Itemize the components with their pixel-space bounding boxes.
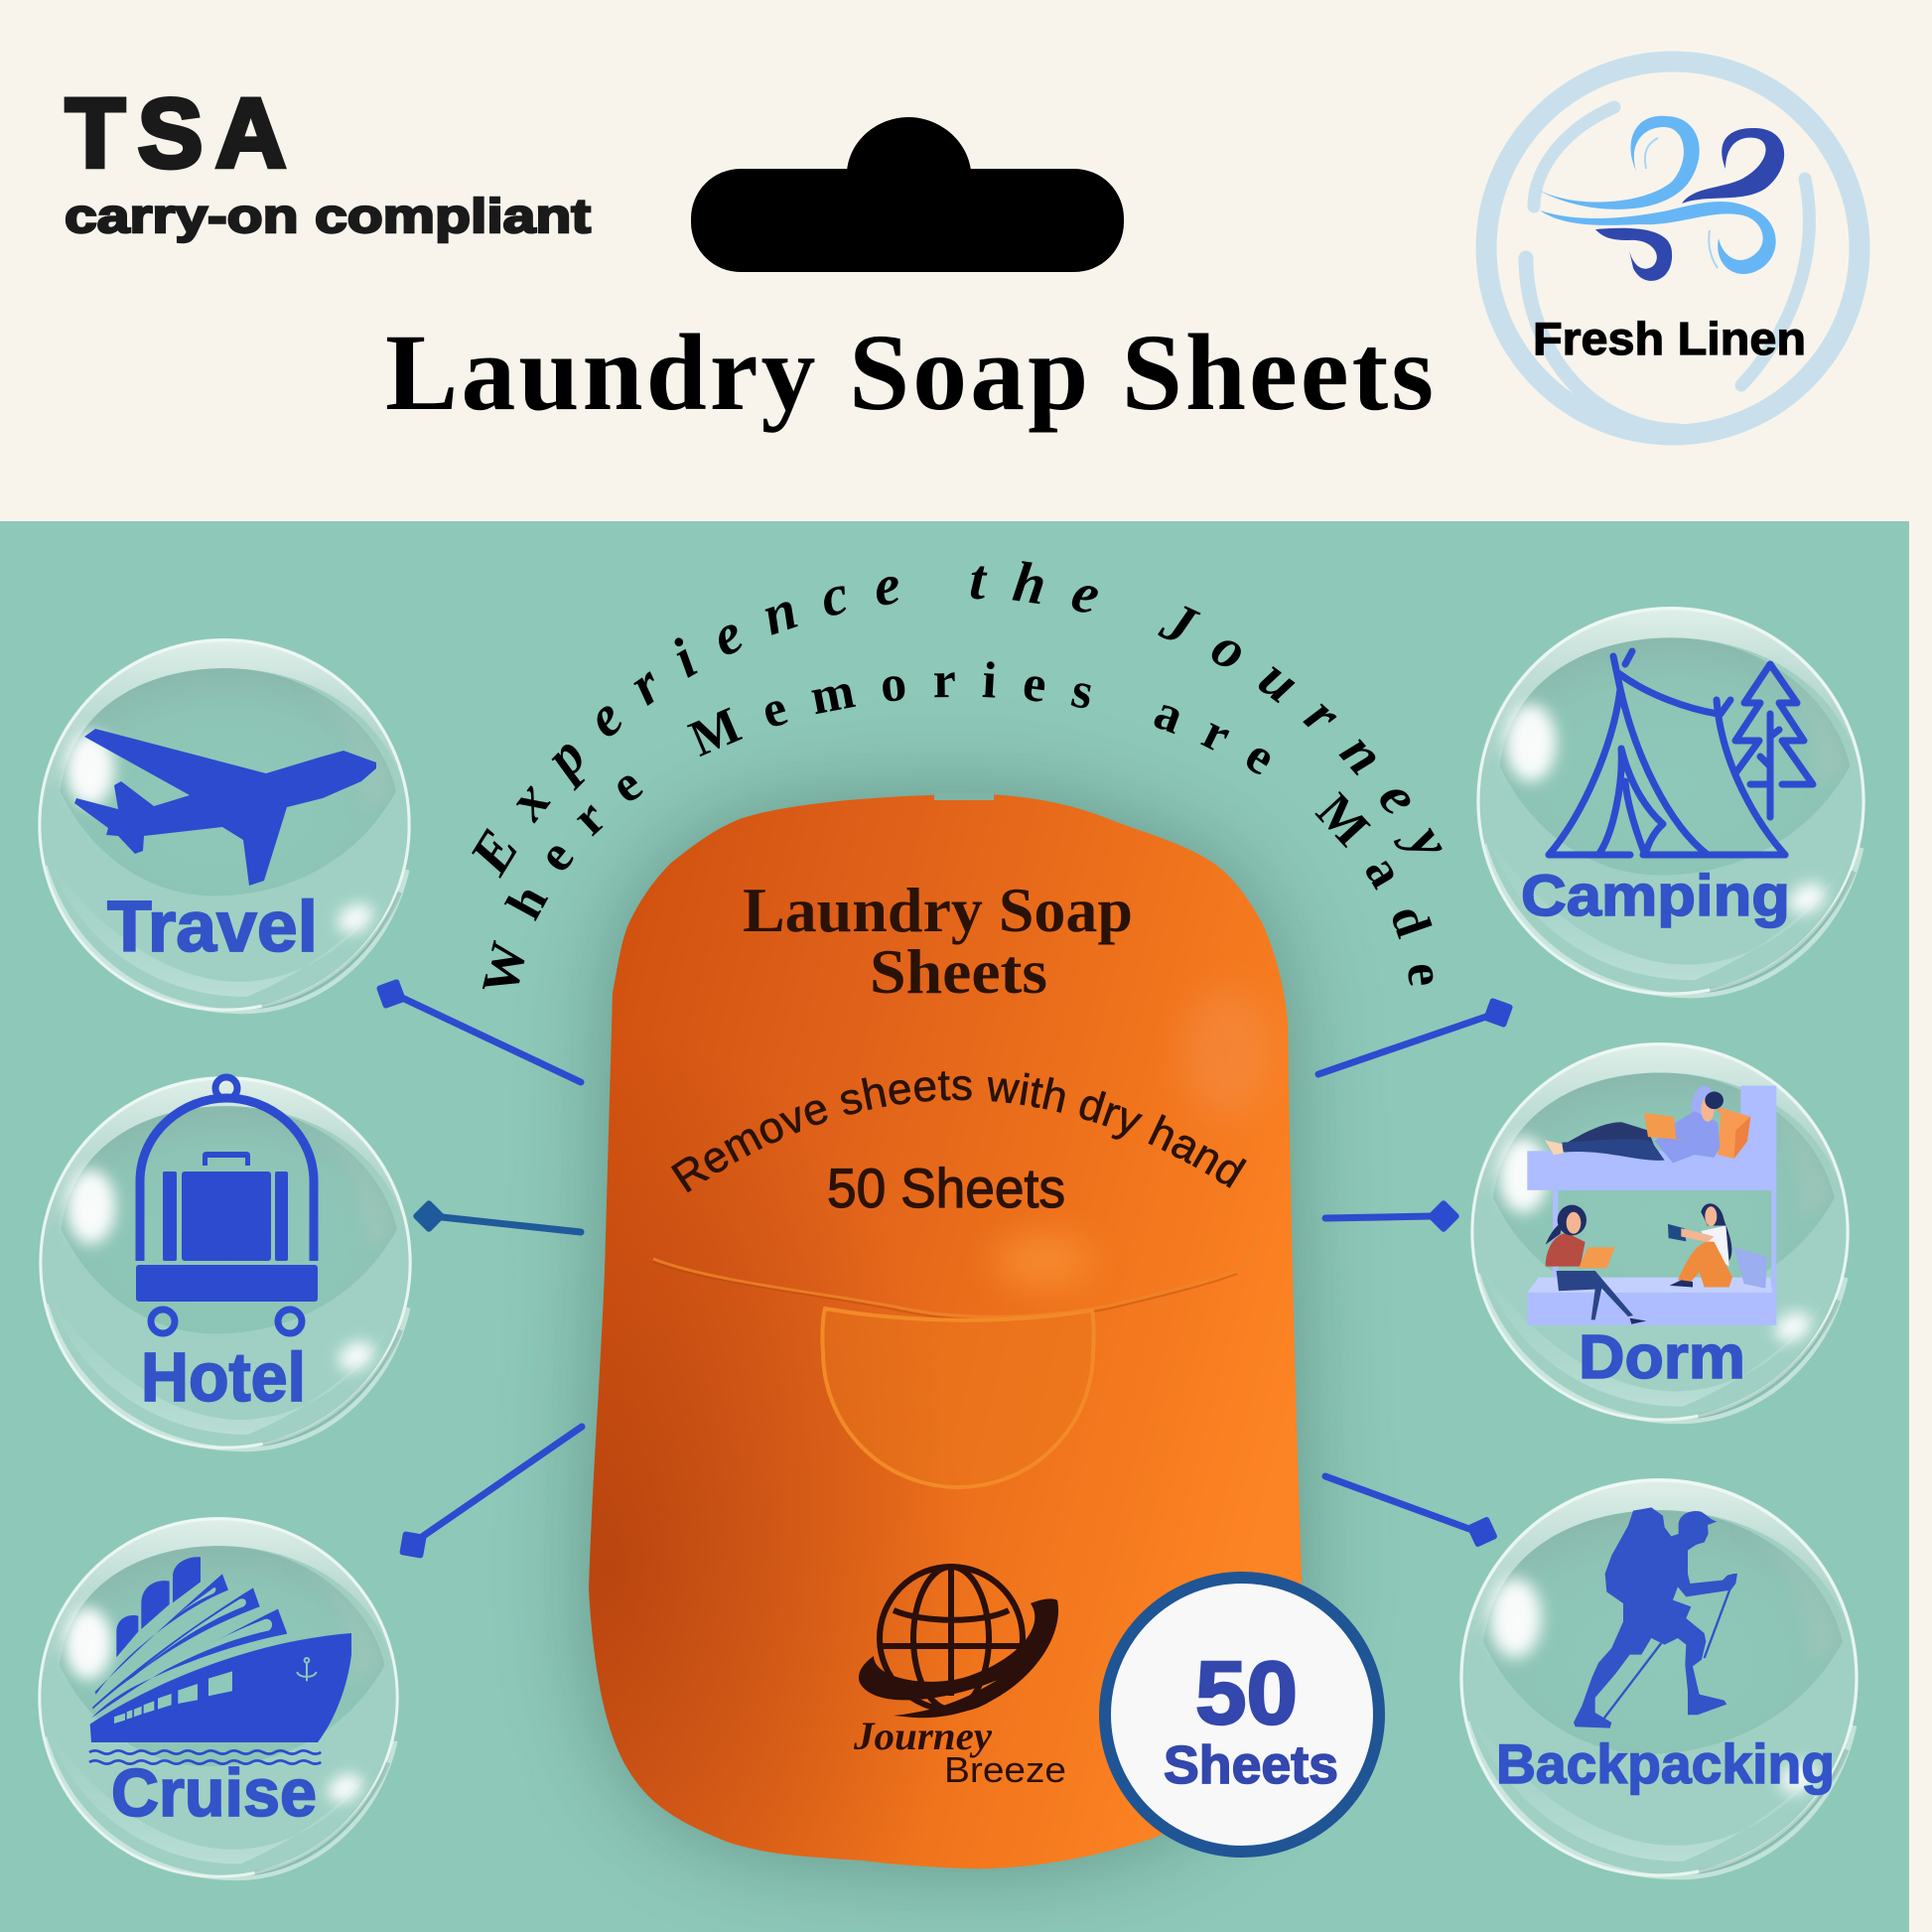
- logo: journey breeze: Journey: [853, 1714, 992, 1758]
- icon: black hanger tab: [691, 117, 1124, 272]
- panel: camping bubble: [1476, 607, 1865, 996]
- product title: Sheets: [870, 937, 1047, 1007]
- badge: 50 sheets: 50: [1195, 1644, 1298, 1743]
- product shadow: [589, 794, 1302, 1868]
- product: orange soap case: [589, 792, 1302, 1868]
- panel: cruise bubble: Cruise: [111, 1755, 317, 1831]
- badge: 50 sheets: [1105, 1578, 1379, 1852]
- connector: travel: [376, 979, 581, 1082]
- panel: backpacking bubble: [1459, 1478, 1859, 1877]
- panel: dorm bubble: Dorm: [1579, 1323, 1745, 1392]
- product title: Laundry Soap: [743, 876, 1133, 945]
- badge: 50 sheets: Sheets: [1164, 1735, 1338, 1795]
- connector: hotel: [412, 1199, 581, 1233]
- panel: travel bubble: [38, 638, 411, 1012]
- teal panel: [0, 521, 1909, 1932]
- product title: [743, 876, 1133, 1007]
- title: Laundry Soap Sheets: [385, 312, 1434, 433]
- panel: backpacking bubble: Backpacking: [1496, 1732, 1835, 1795]
- panel: dorm bubble: [1470, 1042, 1850, 1422]
- panel: travel bubble: Travel: [107, 888, 318, 967]
- connector: backpacking: [1325, 1476, 1498, 1548]
- connector: dorm: [1325, 1199, 1460, 1233]
- logo: journey breeze: [853, 1567, 1066, 1790]
- panel: camping bubble: Camping: [1521, 864, 1790, 928]
- panel: cruise bubble: [38, 1517, 399, 1878]
- arc text: experience the journey: Where Memories are Made: [483, 661, 1434, 989]
- connector: camping: [1318, 998, 1513, 1074]
- curved instruction text: Remove sheets with dry hand: [671, 1071, 1247, 1193]
- carry-on compliant subheading: carry-on compliant: [65, 191, 591, 243]
- arc text: experience the journey: Experience the Journey: [472, 561, 1443, 879]
- TSA heading: TSA: [66, 78, 286, 188]
- badge: fresh linen: Fresh Linen: [1533, 313, 1806, 364]
- connector: cruise: [399, 1427, 582, 1559]
- panel: hotel bubble: Hotel: [141, 1338, 306, 1416]
- panel: hotel bubble: [39, 1076, 412, 1449]
- badge: fresh linen: [1486, 62, 1860, 435]
- logo: journey breeze: Breeze: [944, 1749, 1066, 1790]
- product sheet count: 50 Sheets: [827, 1157, 1065, 1219]
